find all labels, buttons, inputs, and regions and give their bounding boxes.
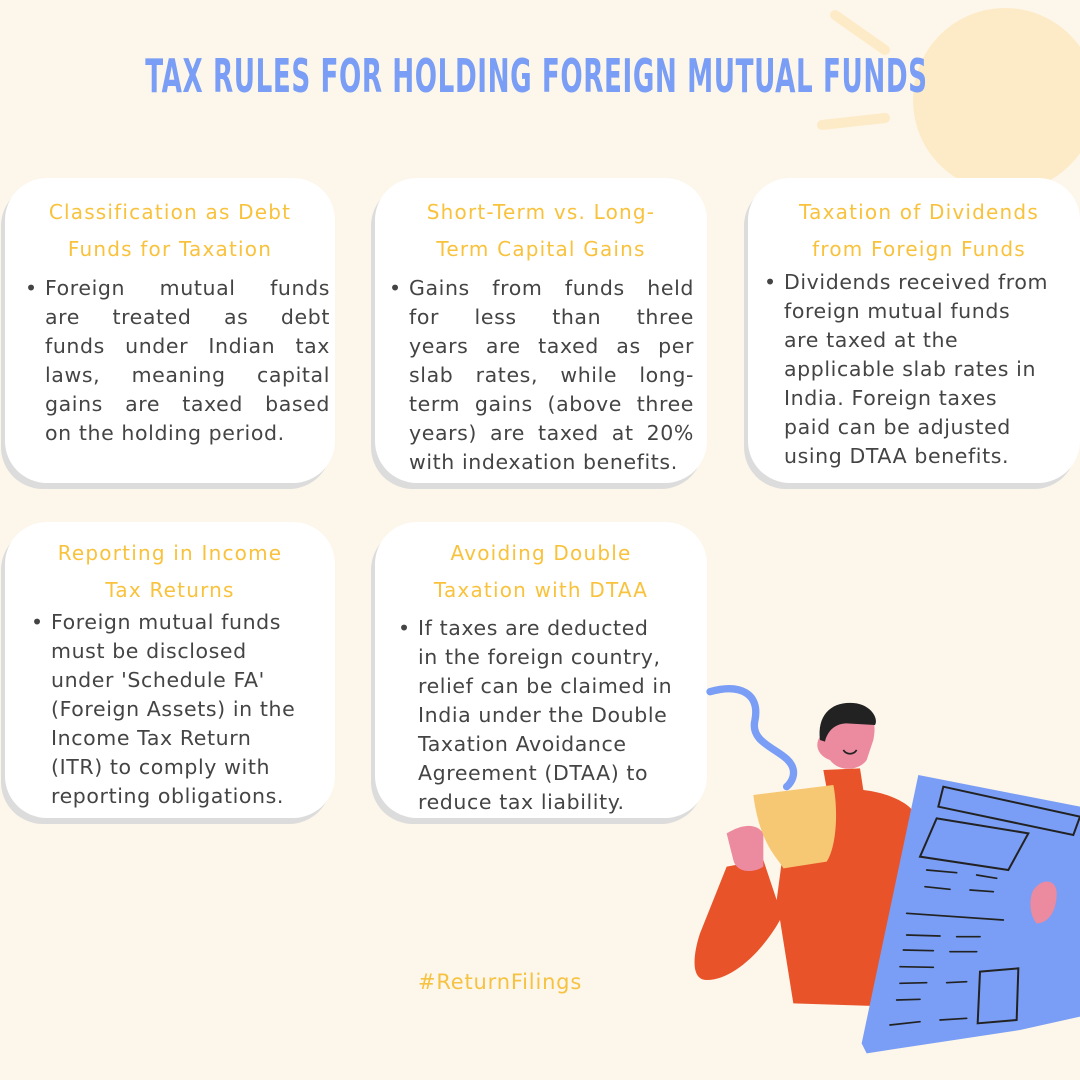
body text: Foreign mutual funds bbox=[45, 276, 330, 300]
body text: are taxed at the bbox=[784, 328, 958, 352]
heading bbox=[798, 200, 1039, 261]
panel: classification bbox=[5, 178, 335, 483]
body text: If taxes are deducted bbox=[418, 616, 649, 640]
panel: short vs long term bbox=[375, 178, 707, 483]
body text: slab rates, while long- bbox=[409, 363, 694, 387]
body text: reduce tax liability. bbox=[418, 790, 625, 814]
body text: for less than three bbox=[409, 305, 694, 329]
body text bbox=[418, 614, 703, 817]
body text: (ITR) to comply with bbox=[51, 755, 270, 779]
heading: Classification as Debt bbox=[49, 200, 291, 224]
body text: foreign mutual funds bbox=[784, 299, 1010, 323]
body text: Dividends received from bbox=[784, 270, 1048, 294]
body text: on the holding period. bbox=[45, 421, 285, 445]
body text: in the foreign country, bbox=[418, 645, 661, 669]
body text bbox=[45, 274, 330, 448]
body text: relief can be claimed in bbox=[418, 674, 672, 698]
panel: dividends bbox=[748, 178, 1080, 483]
heading: Tax Returns bbox=[105, 578, 235, 602]
panel: DTAA bbox=[375, 522, 707, 818]
body text: under 'Schedule FA' bbox=[51, 668, 265, 692]
body text: term gains (above three bbox=[409, 392, 694, 416]
body text: Income Tax Return bbox=[51, 726, 252, 750]
heading: Reporting in Income bbox=[58, 541, 282, 565]
body text: Foreign mutual funds bbox=[51, 610, 281, 634]
body text: Taxation Avoidance bbox=[418, 732, 627, 756]
body text: funds under Indian tax bbox=[45, 334, 330, 358]
body text: with indexation benefits. bbox=[409, 450, 678, 474]
body text: (Foreign Assets) in the bbox=[51, 697, 295, 721]
heading: Taxation of Dividends bbox=[799, 200, 1039, 224]
illustration: man with coffee and newspaper bbox=[694, 685, 1080, 1054]
body text: India. Foreign taxes bbox=[784, 386, 997, 410]
body text: Gains from funds held bbox=[409, 276, 694, 300]
right hand bbox=[1030, 882, 1057, 923]
hashtag: #ReturnFilings bbox=[418, 970, 582, 994]
body text: reporting obligations. bbox=[51, 784, 284, 808]
body text: India under the Double bbox=[418, 703, 667, 727]
body text: are treated as debt bbox=[45, 305, 330, 329]
body text: using DTAA benefits. bbox=[784, 444, 1009, 468]
steam bbox=[710, 689, 794, 787]
heading: Short-Term vs. Long- bbox=[427, 200, 655, 224]
heading: Avoiding Double bbox=[450, 541, 632, 565]
hand + cup bbox=[727, 826, 763, 871]
body text bbox=[51, 608, 331, 811]
body text: must be disclosed bbox=[51, 639, 247, 663]
body text: paid can be adjusted bbox=[784, 415, 1011, 439]
heading: from Foreign Funds bbox=[812, 237, 1026, 261]
newspaper bbox=[862, 775, 1080, 1053]
heading: Funds for Taxation bbox=[68, 237, 272, 261]
heading: Term Capital Gains bbox=[436, 237, 646, 261]
title: TAX RULES FOR HOLDING FOREIGN MUTUAL FUNDS bbox=[145, 49, 928, 103]
body text: laws, meaning capital bbox=[45, 363, 330, 387]
head bbox=[817, 706, 875, 769]
body text: Agreement (DTAA) to bbox=[418, 761, 648, 785]
heading: Taxation with DTAA bbox=[434, 578, 648, 602]
heading bbox=[427, 200, 655, 261]
body text: gains are taxed based bbox=[45, 392, 330, 416]
body text: applicable slab rates in bbox=[784, 357, 1036, 381]
body text: years are taxed as per bbox=[409, 334, 694, 358]
heading bbox=[58, 541, 282, 602]
body text bbox=[409, 274, 694, 477]
body text: years) are taxed at 20% bbox=[409, 421, 694, 445]
panel: reporting bbox=[5, 522, 335, 818]
body text bbox=[784, 268, 1074, 471]
heading bbox=[49, 200, 291, 261]
heading bbox=[434, 541, 648, 602]
body bbox=[695, 768, 913, 1007]
